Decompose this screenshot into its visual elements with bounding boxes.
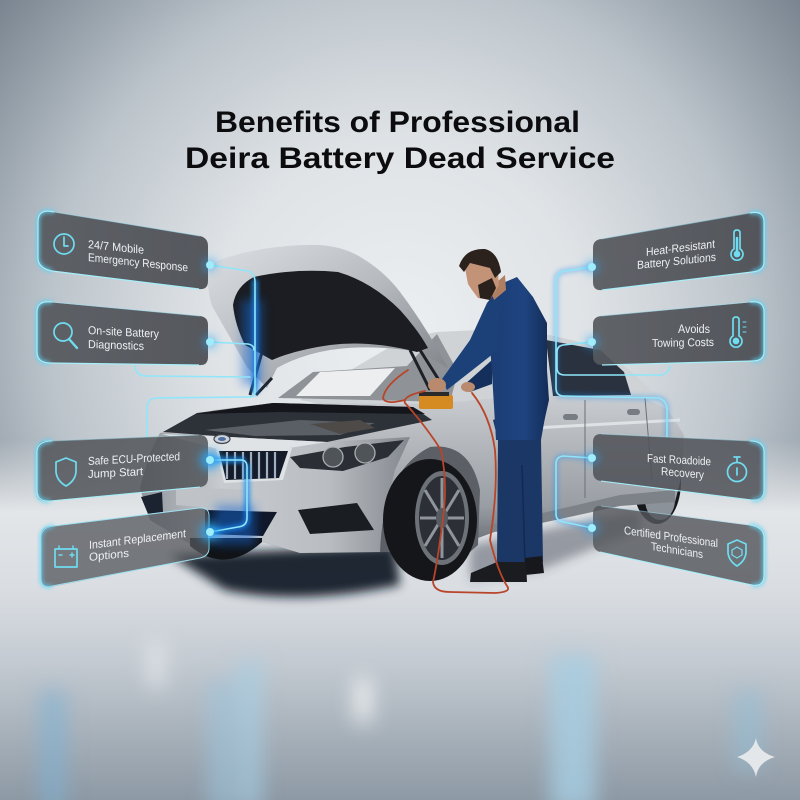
rear wheel bbox=[633, 440, 681, 524]
panel: heat-resistant battery solutions bbox=[593, 212, 764, 290]
connector dots bbox=[201, 260, 597, 541]
icon: clock bbox=[54, 234, 74, 254]
panel: certified professional technicians bbox=[593, 506, 764, 585]
label bbox=[89, 528, 187, 564]
front bumper bbox=[140, 433, 410, 553]
door lines and handles bbox=[495, 398, 680, 498]
hair bbox=[459, 249, 501, 278]
left connector lines bbox=[147, 265, 255, 442]
front-left tyre bbox=[190, 538, 262, 560]
face bbox=[465, 262, 499, 300]
windshield bbox=[278, 334, 458, 402]
icon: thermometer with scale bbox=[730, 317, 746, 347]
right connector lines bbox=[556, 267, 667, 437]
label bbox=[88, 325, 159, 353]
hands bbox=[428, 378, 475, 392]
label: Instant Replacement bbox=[89, 528, 187, 552]
side windows bbox=[546, 340, 631, 396]
label bbox=[624, 525, 718, 561]
grille bbox=[216, 448, 292, 483]
legs bbox=[493, 400, 548, 565]
label: 24/7 Mobile bbox=[88, 239, 144, 257]
number plate bbox=[176, 487, 253, 510]
bmw logo bbox=[214, 434, 230, 444]
front wheel bbox=[380, 447, 480, 581]
label bbox=[652, 324, 714, 350]
label bbox=[647, 453, 711, 482]
title: Deira Battery Dead Service bbox=[185, 142, 615, 175]
connector lines bbox=[135, 265, 670, 545]
mechanic bbox=[428, 249, 549, 582]
panel: instant replacement options bbox=[41, 508, 209, 587]
red jumper cables bbox=[383, 370, 508, 593]
label: Technicians bbox=[651, 541, 703, 561]
label: Towing Costs bbox=[652, 337, 714, 350]
leg crease bbox=[522, 465, 525, 562]
blue glow on grille and hood bbox=[215, 300, 262, 545]
label: On-site Battery bbox=[88, 325, 159, 341]
icon: thermometer bbox=[731, 230, 743, 260]
label: Certified Professional bbox=[624, 525, 718, 550]
title: Benefits of Professional bbox=[215, 106, 580, 139]
icon: sparkle watermark bbox=[737, 738, 775, 777]
near arm bbox=[442, 298, 500, 390]
panel: fast roadside recovery bbox=[593, 434, 764, 500]
label: Options bbox=[89, 548, 129, 564]
headlight bbox=[290, 440, 404, 471]
car bbox=[140, 330, 684, 581]
label: Diagnostics bbox=[88, 339, 144, 353]
icon: certified shield bbox=[728, 540, 746, 566]
icon: stopwatch bbox=[728, 457, 746, 482]
engine bay bbox=[163, 403, 432, 442]
car roof and glass bbox=[300, 330, 660, 420]
torso bbox=[487, 277, 549, 440]
icon: magnifier bbox=[54, 323, 77, 348]
lower air intake bbox=[298, 503, 374, 534]
side skirt bbox=[470, 490, 675, 532]
bonnet edge bbox=[162, 434, 327, 449]
icon: shield bbox=[56, 458, 76, 486]
car shadow bbox=[170, 510, 640, 597]
label: Heat-Resistant bbox=[646, 238, 716, 259]
open hood bbox=[208, 245, 448, 395]
title bbox=[185, 106, 615, 175]
neck bbox=[490, 275, 506, 300]
label: Emergency Response bbox=[88, 252, 188, 275]
label: Jump Start bbox=[88, 466, 144, 481]
label: Fast Roadoide bbox=[647, 453, 711, 468]
panel: safe ecu-protected jump start bbox=[37, 435, 208, 501]
label: Avoids bbox=[678, 324, 710, 336]
icon: battery bbox=[55, 546, 77, 567]
far arm bbox=[464, 360, 492, 392]
panel: on-site battery diagnostics bbox=[37, 302, 208, 365]
left fog lamp bbox=[141, 492, 163, 514]
panel: 24/7 mobile emergency response bbox=[38, 211, 208, 289]
label bbox=[637, 238, 716, 272]
label: Battery Solutions bbox=[637, 252, 716, 272]
label bbox=[88, 239, 188, 275]
beard bbox=[478, 278, 496, 300]
label: Safe ECU-Protected bbox=[88, 451, 180, 468]
glow: left connectors bbox=[210, 282, 255, 532]
label bbox=[88, 451, 180, 481]
shoes bbox=[470, 556, 544, 582]
label: Recovery bbox=[661, 466, 704, 482]
car body bbox=[140, 396, 684, 553]
panel: avoids towing costs bbox=[593, 302, 764, 365]
battery tester bbox=[419, 392, 453, 409]
glow: right connectors bbox=[556, 267, 667, 528]
lower grille bbox=[205, 510, 277, 536]
